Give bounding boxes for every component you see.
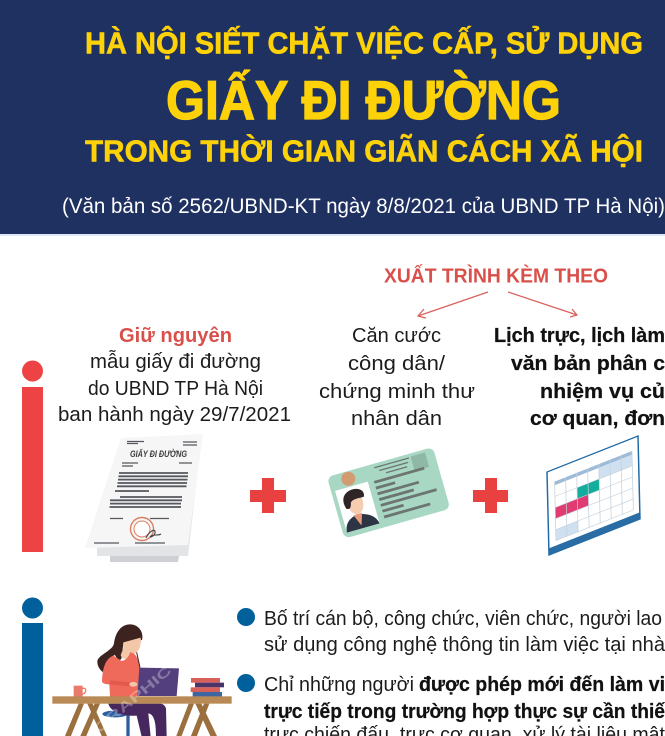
woman [97,624,179,697]
form description: do UBND TP Hà Nội [88,377,263,400]
form description: mẫu giấy đi đường [90,350,261,373]
source note: (Văn bản số 2562/UBND-KT ngày 8/8/2021 của UBND TP Hà Nội) [62,195,665,218]
bullet 1 [237,608,255,626]
icon: travel permit document: GIẤY ĐI ĐƯỜNG [130,448,187,460]
highlight: Giữ nguyên: Giữ nguyên [119,324,232,347]
text block: work schedule: cơ quan, đơn [530,407,665,430]
panel: header banner [0,0,665,236]
form description [58,350,291,426]
text block: citizen ID: Căn cước [352,324,441,347]
form description: ban hành ngày 29/7/2021 [58,403,291,426]
arrow: to citizen ID [418,292,488,318]
bullet text 1 [264,607,665,656]
text block: citizen ID: chứng minh thư [319,380,475,403]
list: telework measures [237,607,665,736]
text block: keep the form [58,324,291,426]
books [191,678,224,697]
illustration: woman working on laptop [52,624,232,736]
icon: calendar schedule [547,436,640,555]
bullet 2 [237,674,255,692]
bullet text 1: sử dụng công nghệ thông tin làm việc tại nhà [264,633,665,656]
text block: work schedule: nhiệm vụ củ [540,380,665,403]
icon: red letter i marker [22,360,43,552]
title line 3: TRONG THỜI GIAN GIÃN CÁCH XÃ HỘI [85,132,643,168]
text block: citizen ID [319,324,475,430]
icon: travel permit document [85,434,203,562]
title line 2: GIẤY ĐI ĐƯỜNG [166,69,561,131]
arrow: to work schedule [508,292,577,317]
icon: blue letter i marker [22,598,43,736]
icon: plus sign 1 [250,478,286,513]
text block: citizen ID: công dân/ [348,352,445,375]
icon: ID card [327,447,450,539]
watermark: GRAPHIC [91,662,175,736]
title line 1: HÀ NỘI SIẾT CHẶT VIỆC CẤP, SỬ DỤNG [85,24,643,60]
heading: present together with: XUẤT TRÌNH KÈM THEO [384,264,608,288]
text block: work schedule [494,324,665,430]
bullet text 2 [264,673,665,736]
text block: citizen ID: nhân dân [351,407,442,430]
icon: plus sign 2 [473,478,508,513]
text block: work schedule: văn bản phân c [511,352,665,375]
bullet text 2: Chỉ những người [264,673,414,696]
table [52,696,232,736]
cup [74,686,86,697]
stool and legs [102,704,167,736]
